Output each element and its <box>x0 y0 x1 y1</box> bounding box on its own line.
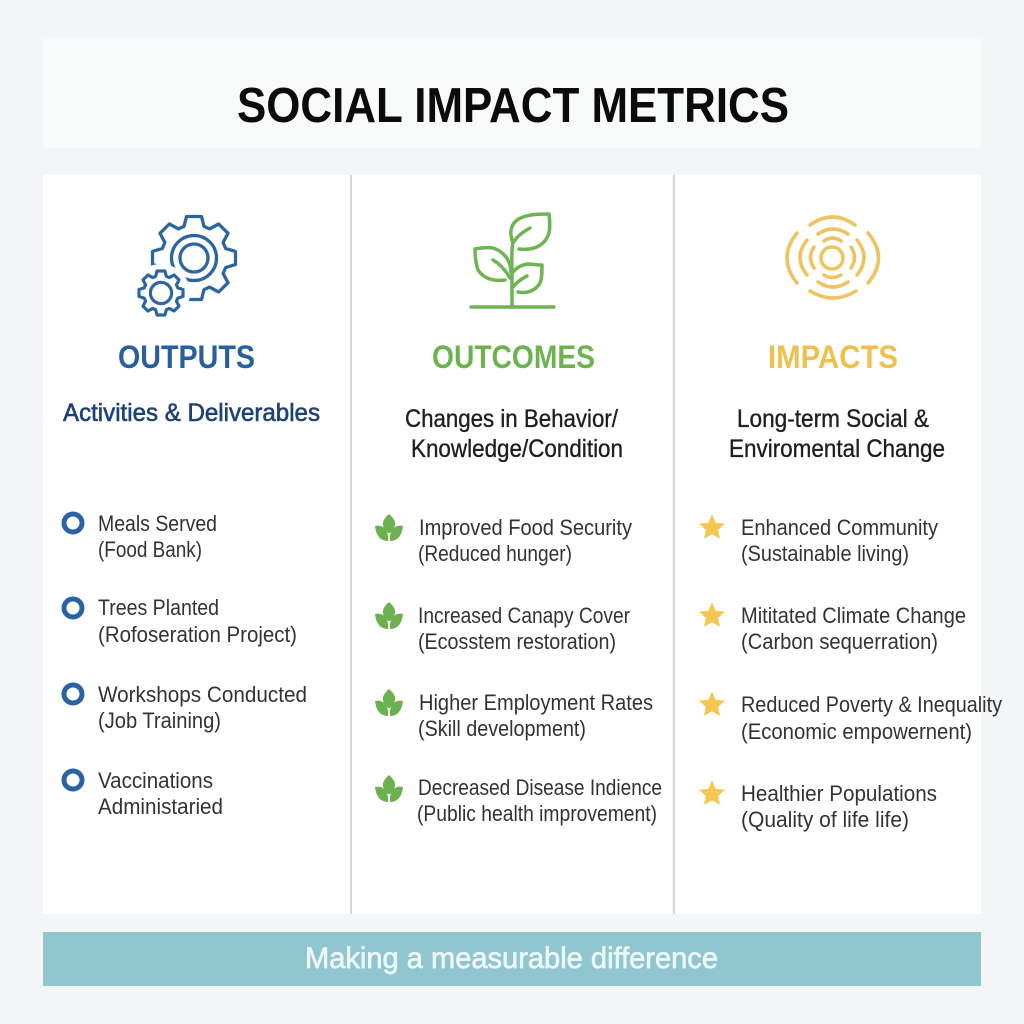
panel: outcomes <box>352 175 672 914</box>
icon: gears <box>132 216 236 322</box>
heading: outcomes: OUTCOMES <box>432 339 595 375</box>
list item: climate <box>700 603 966 654</box>
list item: trees planted <box>64 595 297 647</box>
list item: workshops conducted: Workshops Conducted <box>98 682 307 707</box>
subheading: outcomes: Changes in Behavior/ <box>405 405 618 433</box>
list item: community: (Sustainable living) <box>741 541 909 566</box>
subheading: impacts: Long-term Social & <box>737 405 929 433</box>
list item: vaccinations: Vaccinations <box>98 768 213 793</box>
list item: canopy cover: (Ecosstem restoration) <box>418 629 616 654</box>
list item: disease incidence: (Public health improvement) <box>417 801 657 826</box>
list item: community <box>700 515 938 566</box>
list item: trees planted: (Rofoseration Project) <box>98 622 297 647</box>
list item: climate: Mititated Climate Change <box>741 603 966 628</box>
list item: canopy cover <box>375 602 630 654</box>
list item: workshops conducted <box>64 682 307 733</box>
list item: vaccinations <box>64 768 223 819</box>
list item: employment: (Skill development) <box>418 716 586 741</box>
subheading: outputs: Activities & Deliverables <box>63 399 320 427</box>
subheading: impacts: Enviromental Change <box>729 435 945 463</box>
list item: food security <box>375 514 632 566</box>
list item: vaccinations: Administaried <box>98 794 223 819</box>
subheading: outcomes: Knowledge/Condition <box>411 435 623 463</box>
list item: food security: Improved Food Security <box>419 515 632 540</box>
heading: impacts: IMPACTS <box>768 339 898 375</box>
icon: radiating rings <box>787 217 878 298</box>
list item: disease incidence: Decreased Disease Indience <box>418 775 662 800</box>
heading: outputs: OUTPUTS <box>118 339 255 375</box>
list item: workshops conducted: (Job Training) <box>98 708 221 733</box>
panel: impacts <box>675 175 1002 914</box>
panel: outputs <box>43 175 350 914</box>
footer banner: Making a measurable difference <box>305 942 718 975</box>
list item: climate: (Carbon sequerration) <box>741 629 938 654</box>
footer banner <box>43 932 981 986</box>
list item: poverty: (Economic empowernent) <box>741 719 972 744</box>
icon: plant <box>471 214 554 307</box>
list item: community: Enhanced Community <box>741 515 938 540</box>
list item: meals served: Meals Served <box>98 511 217 536</box>
subheading: impacts <box>729 405 945 463</box>
list item: disease incidence <box>375 775 662 826</box>
list item: employment <box>375 689 653 741</box>
list item: trees planted: Trees Planted <box>98 595 219 620</box>
list item: populations <box>700 781 937 832</box>
list item: meals served: (Food Bank) <box>98 537 202 562</box>
list item: employment: Higher Employment Rates <box>419 690 653 715</box>
list item: meals served <box>64 511 217 562</box>
list item: food security: (Reduced hunger) <box>418 541 572 566</box>
subheading: outcomes <box>405 405 623 463</box>
list item: populations: Healthier Populations <box>741 781 937 806</box>
list item: poverty: Reduced Poverty & Inequality <box>741 692 1002 717</box>
title banner: SOCIAL IMPACT METRICS <box>237 79 789 133</box>
list item: canopy cover: Increased Canapy Cover <box>418 603 630 628</box>
title banner <box>43 38 981 148</box>
list item: populations: (Quality of life life) <box>741 807 909 832</box>
list item: poverty <box>700 692 1002 744</box>
